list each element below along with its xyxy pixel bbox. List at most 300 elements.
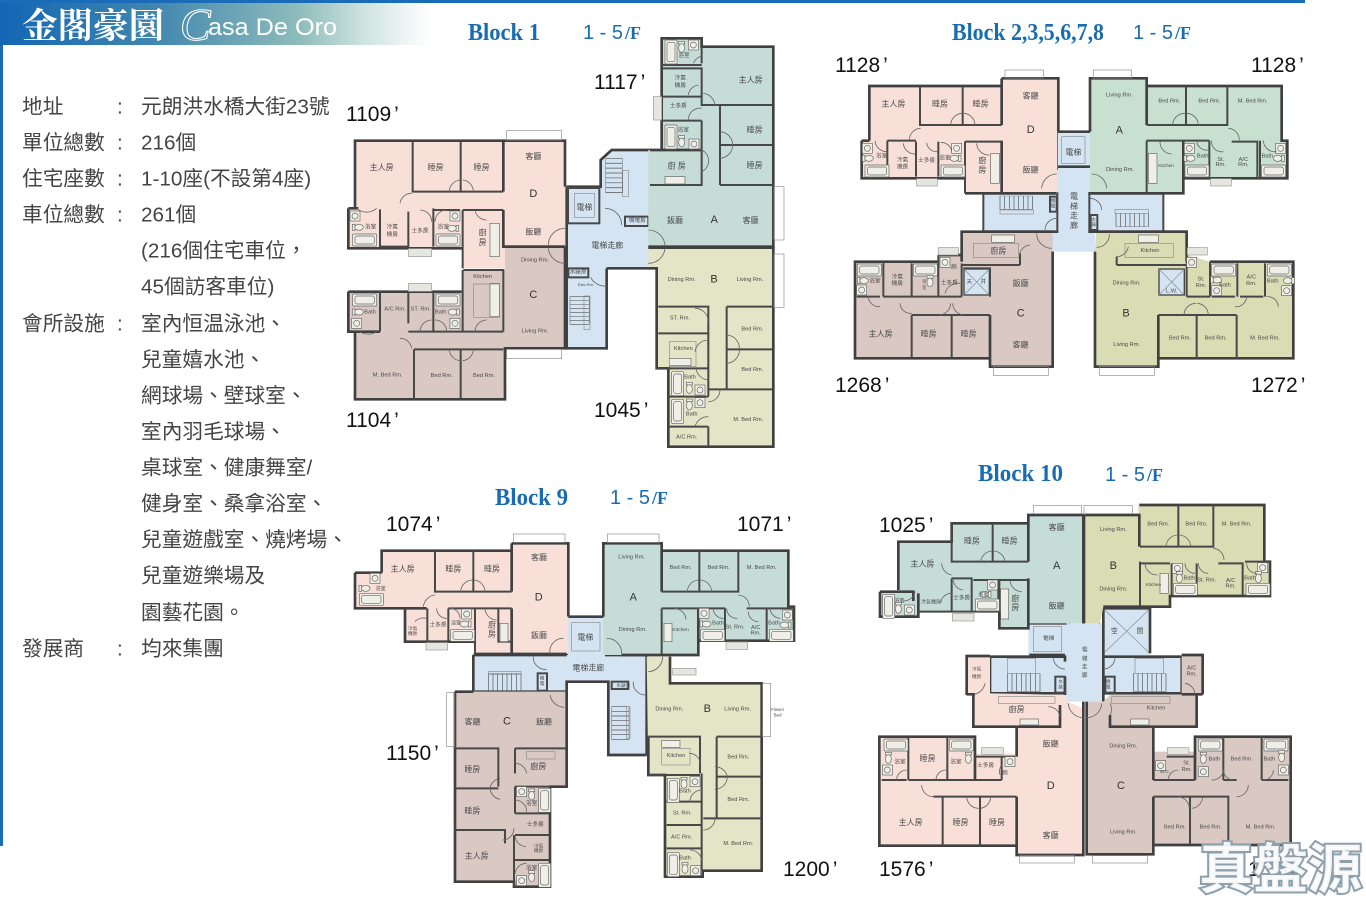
unit D: D xyxy=(529,188,537,200)
unit D: 機房 xyxy=(408,630,418,637)
unit B: B xyxy=(704,703,711,715)
unit B: B xyxy=(1122,307,1130,319)
unit area labels: 1074’ xyxy=(386,513,440,536)
unit D: 士多房 xyxy=(430,620,447,628)
unit C: 浴室 xyxy=(526,863,538,871)
unit A: 冷氣 xyxy=(675,73,686,81)
unit A: Living Rm. xyxy=(618,554,645,560)
property information list: 元朗洪水橋大街23號 xyxy=(141,96,330,118)
unit C: 客廳 xyxy=(465,716,481,726)
core: lift lobby, stairs and void xyxy=(990,608,1182,702)
property information list: 均來集團 xyxy=(141,638,224,660)
heading: Block 10: Block 10 xyxy=(978,461,1063,487)
unit C: Rm. xyxy=(1186,671,1197,677)
unit A: 睡房 xyxy=(964,535,980,545)
core: lift lobby, stairs and void: 電 xyxy=(1082,647,1088,654)
unit C: 浴室 xyxy=(869,277,881,285)
unit D: 飯廳 xyxy=(531,630,547,640)
unit D: 睡房 xyxy=(973,98,989,108)
property information list: 1-10座(不設第4座) xyxy=(141,168,311,190)
unit C: Bed Rm. xyxy=(1200,824,1222,830)
unit D: 廚房 xyxy=(1009,704,1025,714)
unit A: 士多房 xyxy=(670,102,687,110)
property information list: : xyxy=(117,96,123,118)
unit C: W.C. xyxy=(1160,769,1170,774)
unit A: 客廳 xyxy=(743,215,759,225)
unit A xyxy=(648,38,784,247)
heading: Block 1: Block 1 xyxy=(468,20,540,46)
unit D: 機房 xyxy=(972,673,982,680)
property information list: 室內羽毛球場、 xyxy=(141,420,286,444)
unit C: A/C xyxy=(1187,665,1196,671)
heading: Block 2,3,5,6,7,8: Block 2,3,5,6,7,8 xyxy=(952,20,1104,46)
heading: Block 9: /F xyxy=(651,488,668,508)
unit D: 房 xyxy=(488,628,496,638)
heading: Block 2,3,5,6,7,8: 1 - 5 xyxy=(1133,22,1173,44)
unit B: Bed Rm. xyxy=(1169,335,1191,341)
unit C: C xyxy=(1117,780,1125,792)
unit C: 主人房 xyxy=(869,328,893,338)
core: lift lobby and stairs: 走 xyxy=(1070,211,1078,220)
property information list: 園藝花園。 xyxy=(141,602,244,624)
unit A: Kitchen xyxy=(1158,163,1174,168)
unit C: 睡房 xyxy=(961,328,977,338)
unit B xyxy=(1095,232,1294,375)
unit C: Living Rm. xyxy=(1110,829,1137,835)
heading: Block 10: 1 - 5 xyxy=(1105,464,1145,486)
unit C: 廁 xyxy=(951,262,957,270)
heading: Block 1: 1 - 5 xyxy=(583,22,623,44)
unit B: M. Bed Rm. xyxy=(723,841,754,847)
unit B: Bed Rm. xyxy=(741,367,764,373)
unit D: 睡房 xyxy=(953,817,969,827)
unit A: A/C xyxy=(751,625,760,631)
core: lift lobby and stairs: 電梯 xyxy=(1065,147,1081,157)
unit A: Bath xyxy=(1262,154,1273,160)
unit B: Living Rm. xyxy=(1100,527,1127,533)
unit A: 房 xyxy=(1011,602,1019,612)
unit B: B xyxy=(710,273,718,285)
unit C: C xyxy=(503,715,511,727)
unit B: Rm. xyxy=(1196,283,1207,289)
unit A: 睡房 xyxy=(1002,535,1018,545)
unit C: 室 xyxy=(922,284,927,290)
unit C: 士多房 xyxy=(527,820,544,828)
unit B: Bed Rm. xyxy=(727,797,750,803)
unit A xyxy=(603,534,794,655)
unit area labels: 1576’ xyxy=(1248,858,1302,881)
property information list: : xyxy=(117,168,123,190)
unit C: Bed Rm. xyxy=(473,373,495,379)
property information list: 兒童遊樂場及 xyxy=(141,564,265,588)
unit A xyxy=(1090,70,1287,193)
unit B: A/C xyxy=(1247,274,1256,280)
unit C: A/C Rm. xyxy=(384,306,406,312)
unit C: 機房 xyxy=(892,279,903,287)
unit B: Bath xyxy=(1244,575,1256,581)
unit B: Kitchen xyxy=(667,753,685,759)
unit A: 浴室 xyxy=(678,126,689,134)
unit B: Kitchen xyxy=(674,346,693,352)
heading: Block 1: /F xyxy=(624,23,641,43)
unit D: 廚 xyxy=(978,155,986,165)
core: lift lobby, stairs and void: 錶 xyxy=(1059,683,1064,690)
unit C: M. Bed Rm. xyxy=(1246,824,1276,830)
unit D: 睡房 xyxy=(428,162,444,172)
title: script capital C: C xyxy=(180,0,212,50)
property information list: : xyxy=(117,132,123,154)
unit D: 浴室 xyxy=(451,619,461,626)
unit C: Bath xyxy=(1264,756,1275,762)
unit C: 浴室 xyxy=(526,799,538,807)
unit C xyxy=(447,692,567,887)
title: English name: asa De Oro xyxy=(208,14,337,41)
unit D xyxy=(355,534,568,654)
unit D: 浴室 xyxy=(365,222,377,230)
unit area labels: 1025’ xyxy=(879,514,933,537)
unit C: 冷氣 xyxy=(892,272,903,280)
property information list: : xyxy=(117,638,123,660)
unit A: Living Rm. xyxy=(1106,93,1133,99)
unit C: Bath xyxy=(1209,756,1220,762)
property information list: 會所設施 xyxy=(22,312,105,336)
unit A: 浴室 xyxy=(894,597,904,604)
heading: Block 9: Block 9 xyxy=(495,485,568,511)
floor plan: Block 1 xyxy=(348,38,784,447)
unit B: Dining Rm. xyxy=(1099,586,1128,592)
unit A: Dining Rm. xyxy=(1106,167,1134,173)
core: lift lobby and stairs: 錶 xyxy=(1091,221,1096,228)
unit D: 廁 xyxy=(1002,768,1008,776)
unit D: 房 xyxy=(479,237,487,247)
unit A: Bath xyxy=(768,620,780,626)
unit D: D xyxy=(1027,124,1035,136)
unit A: 士多房 xyxy=(953,593,970,601)
unit D xyxy=(348,131,565,268)
unit D: 飯廳 xyxy=(1023,164,1039,174)
property information list: 網球場、壁球室、 xyxy=(141,384,307,408)
unit C: 主人房 xyxy=(465,850,489,860)
unit B: L.W. xyxy=(1166,289,1178,295)
floor plan: Blocks 2,3,5,6,7,8 xyxy=(855,70,1294,375)
unit area labels: 1109’ xyxy=(346,103,399,126)
unit C: 睡房 xyxy=(464,764,480,774)
unit C: St. xyxy=(1183,760,1191,766)
unit A: A/C xyxy=(1239,157,1248,163)
unit B: Bath xyxy=(686,411,697,417)
unit D: 飯廳 xyxy=(1043,738,1059,748)
unit B: St. Rm. xyxy=(673,811,692,817)
core: lift lobby and stairs xyxy=(473,617,647,755)
unit A: Bed Rm. xyxy=(1158,99,1181,105)
property information list: 兒童遊戲室、燒烤場、 xyxy=(141,528,348,552)
unit B: Bed Rm. xyxy=(741,326,764,332)
core: lift lobby and stairs: 電 xyxy=(540,681,545,687)
unit area labels: 1150’ xyxy=(386,742,439,765)
unit B: M. Bed Rm. xyxy=(733,417,764,423)
unit D: 睡房 xyxy=(989,817,1005,827)
unit B: Bed Rm. xyxy=(727,755,750,761)
unit C: 飯廳 xyxy=(1013,278,1029,288)
unit D: 主人房 xyxy=(881,98,905,108)
unit A: Rm. xyxy=(1238,162,1249,168)
heading: Block 10: /F xyxy=(1146,465,1163,485)
unit B: Kitchen xyxy=(1146,582,1162,587)
unit D: 房 xyxy=(978,164,986,174)
unit D: 浴室 xyxy=(438,222,449,230)
property information list: (216個住宅車位， xyxy=(141,240,307,262)
heading: Block 9: 1 - 5 xyxy=(610,487,650,509)
unit D: 睡房 xyxy=(920,753,936,763)
unit D: D xyxy=(1047,780,1055,792)
core: lift lobby and stairs: 水錶房 xyxy=(616,682,631,689)
unit C: Living Rm. xyxy=(522,329,549,335)
property information list: 桌球室、健康舞室/ xyxy=(141,456,313,480)
unit D: 廚 xyxy=(479,227,487,237)
unit C: C xyxy=(1017,307,1025,319)
unit C xyxy=(348,247,565,399)
core: lift lobby, stairs and void: 水 xyxy=(1059,678,1064,684)
unit area labels: 1268’ xyxy=(835,374,889,397)
unit A: 客廳 xyxy=(1049,522,1065,532)
core: lift lobby and stairs: 機 xyxy=(540,674,545,681)
unit D: 客廳 xyxy=(525,151,541,161)
unit C xyxy=(855,232,1053,375)
unit D: 睡房 xyxy=(484,563,500,573)
unit B: ST. Rm. xyxy=(670,316,690,322)
core: lift lobby and stairs: 電梯走廊 xyxy=(572,662,604,672)
unit B xyxy=(647,657,785,877)
core: lift lobby and stairs: 水錶房 xyxy=(570,267,587,275)
unit C: C xyxy=(529,289,537,301)
unit A: 冷氣機房 xyxy=(921,599,941,606)
unit C: Bath xyxy=(435,310,446,316)
unit A: Bed Rm. xyxy=(1198,99,1221,105)
unit A: A xyxy=(711,214,719,226)
unit D: 冷氣 xyxy=(408,625,418,632)
heading: Block 1 xyxy=(468,20,641,46)
unit C: 廚房 xyxy=(530,761,546,771)
unit area labels: 1071’ xyxy=(737,513,791,536)
core: lift lobby and stairs xyxy=(567,150,650,348)
unit B: Living Rm. xyxy=(724,706,751,712)
unit B: M. Bed Rm. xyxy=(1222,521,1252,527)
core: lift lobby, stairs and void: 廊 xyxy=(1082,671,1088,679)
unit B: Bath xyxy=(679,855,691,861)
property information list xyxy=(22,96,348,660)
unit area labels: 1117’ xyxy=(594,71,645,94)
unit C: 井 xyxy=(981,277,987,285)
unit B xyxy=(1084,505,1270,623)
unit B: Bed Rm. xyxy=(1147,521,1170,527)
unit B: Living Rm. xyxy=(737,277,764,283)
unit A: 睡房 xyxy=(747,124,763,134)
unit A: 廚 房 xyxy=(668,160,686,170)
property information list: 261個 xyxy=(141,204,196,226)
heading: Block 2,3,5,6,7,8: /F xyxy=(1174,23,1191,43)
unit B: Bath xyxy=(1184,575,1195,581)
unit A: 主人房 xyxy=(739,74,763,84)
unit B: A/C xyxy=(1226,578,1235,584)
unit B: Rm. xyxy=(1246,281,1257,287)
unit D xyxy=(862,70,1058,193)
unit D: 客廳 xyxy=(1023,90,1039,100)
core: lift lobby and stairs: 廊 xyxy=(1070,220,1078,230)
unit A: Rm. xyxy=(750,630,761,636)
unit D: 主人房 xyxy=(899,817,923,827)
unit B: Dining Rm. xyxy=(668,277,696,283)
unit B: Bed Rm. xyxy=(1205,335,1227,341)
unit B: A/C Rm. xyxy=(676,434,698,440)
core: lift lobby, stairs and void: 空 xyxy=(1111,626,1118,635)
unit B: Dining Rm. xyxy=(655,706,684,712)
unit A: Bed Rm. xyxy=(670,565,692,571)
unit area labels: 1045’ xyxy=(594,399,648,422)
unit B: Dining Rm. xyxy=(1113,280,1141,286)
unit D: 浴室 xyxy=(894,758,906,766)
unit A: M. Bed Rm. xyxy=(747,565,777,571)
unit D: 睡房 xyxy=(474,162,490,172)
unit A: Dining Rm. xyxy=(619,627,647,633)
unit C: M. Bed Rm. xyxy=(373,373,403,379)
property information list: 兒童嬉水池、 xyxy=(141,348,265,372)
unit A: Rm. xyxy=(1215,162,1226,168)
unit A: 廚 xyxy=(1011,593,1019,603)
unit A: Bath xyxy=(1197,154,1208,160)
unit C: Dining Rm. xyxy=(521,258,549,264)
core: lift lobby and stairs xyxy=(983,132,1187,252)
floor plan: Block 10 xyxy=(879,505,1291,863)
unit B: Bed Rm. xyxy=(1185,521,1208,527)
unit A: M. Bed Rm. xyxy=(1238,99,1268,105)
property information list: 車位總數 xyxy=(22,204,105,226)
unit D: 浴室 xyxy=(876,152,888,160)
property information list: : xyxy=(117,204,123,226)
unit D xyxy=(879,655,1083,863)
unit C: 士多房 xyxy=(941,278,958,286)
unit C: 冷氣 xyxy=(534,842,544,849)
property information list: 室內恒温泳池、 xyxy=(141,312,286,336)
unit D: 飯廳 xyxy=(525,226,541,236)
unit A: St. Rm. xyxy=(726,624,745,630)
unit C: 機房 xyxy=(534,847,544,854)
unit B: Flower xyxy=(771,707,785,712)
unit A: St. xyxy=(1217,157,1225,163)
unit A: Bed Rm. xyxy=(708,565,730,571)
unit B: Bath xyxy=(1219,283,1231,289)
unit B: Bath xyxy=(1267,279,1278,285)
unit A: A xyxy=(630,591,638,603)
unit C: 浴 xyxy=(922,278,927,285)
unit A: A xyxy=(1116,125,1124,137)
unit B: Living Rm. xyxy=(1113,342,1140,348)
unit area labels: 1200’ xyxy=(783,858,837,881)
floor plan: Block 9 xyxy=(355,534,794,887)
title: Chinese name: 金閣豪園 xyxy=(22,7,164,46)
core: lift lobby, stairs and void: 梯 xyxy=(1082,654,1088,662)
unit C: 天 xyxy=(967,278,973,285)
unit area labels: 1272’ xyxy=(1251,374,1305,397)
unit C: Kitchen xyxy=(1147,705,1165,711)
unit C: Bath xyxy=(364,310,376,316)
core: lift lobby and stairs: 電梯走廊 xyxy=(591,240,623,250)
unit D: 浴室 xyxy=(950,758,962,766)
unit area labels xyxy=(346,54,1305,881)
core: lift lobby, stairs and void: 間 xyxy=(1137,627,1144,635)
unit C: 睡房 xyxy=(464,805,480,815)
unit area labels: 1104’ xyxy=(346,409,399,432)
core: lift lobby and stairs: 電梯 xyxy=(576,202,592,212)
unit B: St. xyxy=(1198,276,1205,282)
core: lift lobby and stairs: 水 xyxy=(1091,216,1096,222)
unit A xyxy=(880,506,1083,628)
unit D: 士多房 xyxy=(412,227,429,235)
unit A: 浴室 xyxy=(678,51,690,59)
unit area labels: 1128’ xyxy=(1251,54,1304,77)
core: lift lobby and stairs: 機 xyxy=(1051,197,1056,204)
unit B: M. Bed Rm. xyxy=(1250,335,1280,341)
unit D: 冷氣 xyxy=(897,156,909,164)
core: lift lobby and stairs: 機電房 xyxy=(629,216,646,224)
unit D: 主人房 xyxy=(391,563,415,573)
property information list: : xyxy=(117,312,123,336)
unit A: 主人房 xyxy=(910,558,934,568)
unit A: 浴室 xyxy=(978,591,988,598)
unit D: 冷氣 xyxy=(972,665,982,672)
unit area labels: 1128’ xyxy=(835,54,888,77)
unit C: Bed Rm. xyxy=(431,373,453,379)
unit A: 飯廳 xyxy=(667,215,683,225)
unit B: Rm. xyxy=(1225,584,1236,590)
unit D: 睡房 xyxy=(932,98,948,108)
core: lift lobby and stairs: 電 xyxy=(1070,192,1078,201)
core: lift lobby and stairs: 電梯 xyxy=(577,632,593,642)
unit D: 睡房 xyxy=(445,563,461,573)
property information list: 健身室、桑拿浴室、 xyxy=(141,492,327,516)
property information list: 發展商 xyxy=(22,638,84,660)
unit B: Kitchen xyxy=(1141,248,1159,254)
unit C: Kitchen xyxy=(473,274,492,280)
unit C: ST. Rm. xyxy=(411,306,431,312)
unit C: Bed Rm. xyxy=(1231,756,1253,762)
core: lift lobby and stairs: 電 xyxy=(1051,203,1056,209)
heading: Block 10 xyxy=(978,461,1163,487)
unit A: A xyxy=(1053,560,1061,572)
unit B: St. Rm. xyxy=(1197,578,1217,584)
unit D: 主人房 xyxy=(370,162,394,172)
unit C xyxy=(1087,655,1291,863)
unit D: 浴室 xyxy=(939,153,951,161)
unit B xyxy=(648,248,784,447)
unit A: 睡房 xyxy=(747,160,763,170)
heading: Block 2,3,5,6,7,8 xyxy=(952,20,1191,46)
unit D: 機房 xyxy=(387,230,398,238)
property information list: 216個 xyxy=(141,132,196,154)
unit C: 睡房 xyxy=(921,328,937,338)
unit D: 廚 xyxy=(488,619,496,629)
unit C: Rm. xyxy=(1181,767,1192,773)
unit A: 飯廳 xyxy=(1049,600,1065,610)
unit C: 廚房 xyxy=(990,245,1006,255)
core: lift lobby, stairs and void: 機 xyxy=(1106,678,1111,685)
unit C: 客廳 xyxy=(1013,339,1029,349)
property information list: 45個訪客車位) xyxy=(141,276,274,298)
unit D: 冷氣 xyxy=(387,222,398,230)
unit C: 飯廳 xyxy=(536,716,552,726)
property information list: 單位總數 xyxy=(22,132,105,154)
unit B: A/C Rm. xyxy=(671,835,693,841)
unit C: Dining Rm. xyxy=(1109,744,1138,750)
